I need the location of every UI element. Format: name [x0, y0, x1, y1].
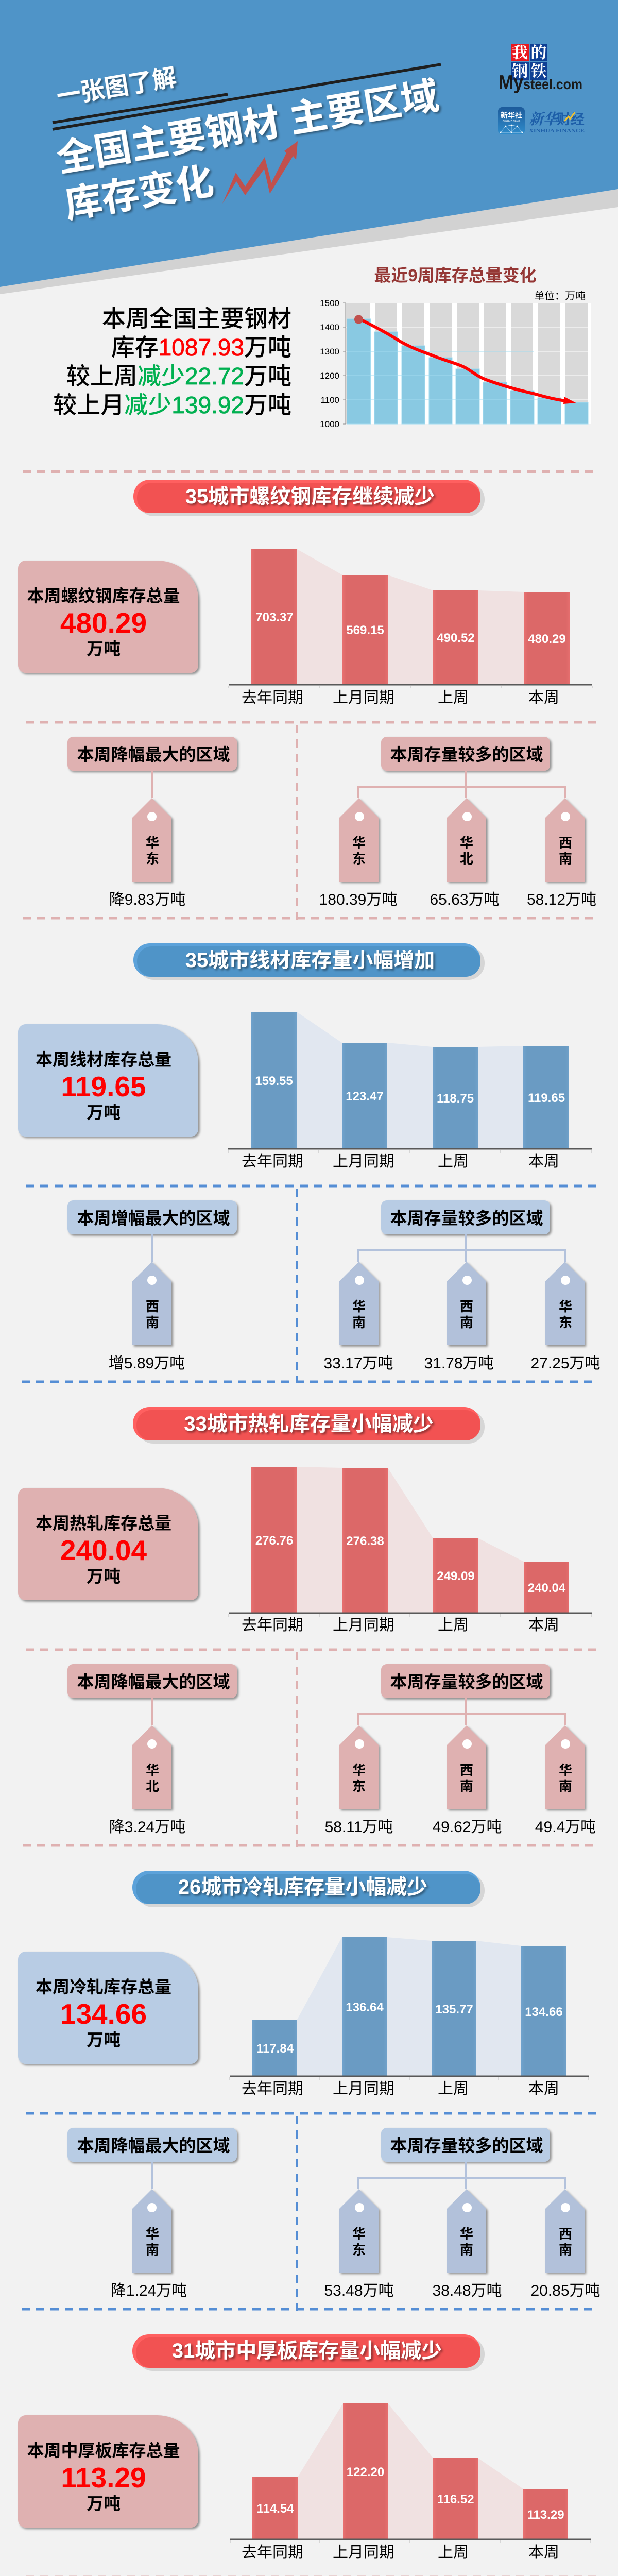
bar chart — [230, 1937, 589, 2097]
largest increase region: 增5.89万吨 — [109, 1355, 185, 1372]
total panel: 本周冷轧库存总量 — [36, 1977, 171, 1996]
tag 3: 南 — [559, 1778, 572, 1794]
bar chart: 276.76 — [255, 1534, 293, 1548]
bar chart — [230, 2403, 591, 2561]
tag 2 — [447, 1725, 486, 1809]
tag 3 — [545, 1725, 585, 1809]
total panel: 119.65 — [61, 1071, 146, 1103]
tag: 华 — [146, 2226, 159, 2242]
total panel — [18, 2415, 198, 2528]
bar chart: 123.47 — [346, 1090, 384, 1104]
tag: 东 — [146, 851, 159, 867]
total panel: 本周线材库存总量 — [36, 1050, 171, 1069]
bar chart: 240.04 — [528, 1581, 566, 1595]
logo: xinhua finance: XINHUA FINANCE — [529, 128, 585, 134]
chart: 9 week inventory — [320, 298, 591, 429]
largest decline region: 降9.83万吨 — [109, 891, 185, 908]
bar chart: 本周 — [528, 1153, 559, 1170]
largest stock regions: 49.4万吨 — [535, 1819, 596, 1836]
bar chart: 上月同期 — [333, 1617, 394, 1634]
largest stock regions: 31.78万吨 — [424, 1355, 494, 1372]
bar chart: 上月同期 — [333, 689, 394, 706]
tag — [132, 798, 171, 882]
logo: mysteel: Mysteel.com — [499, 72, 582, 94]
largest decline region — [67, 737, 237, 908]
tag 3: 南 — [559, 2242, 572, 2258]
tag: 西 — [146, 1299, 159, 1314]
largest stock regions: 58.11万吨 — [325, 1819, 393, 1836]
tag 2: 南 — [460, 2242, 473, 2258]
section heading: 31城市中厚板库存量小幅减少 — [172, 2340, 442, 2362]
largest stock regions — [319, 737, 596, 908]
icon: zigzag arrow — [222, 141, 298, 204]
section heading — [133, 943, 485, 980]
largest stock regions: 58.12万吨 — [527, 891, 596, 908]
logo: xinhua finance: 财经 — [557, 112, 585, 127]
bar chart: 134.66 — [525, 2005, 563, 2019]
bar chart: 136.64 — [346, 2001, 384, 2014]
largest stock regions — [325, 1664, 596, 1836]
logo: xinhua finance: 新华 — [529, 111, 560, 128]
tag 2: 华 — [460, 2226, 473, 2242]
tag: 华 — [146, 835, 159, 851]
section heading: 26城市冷轧库存量小幅减少 — [178, 1876, 427, 1899]
total panel: 万吨 — [87, 1567, 121, 1586]
bar chart: 276.38 — [346, 1534, 384, 1548]
tag 1: 华 — [352, 1299, 366, 1314]
tag: 南 — [146, 1315, 159, 1330]
total panel — [18, 1024, 198, 1137]
trend arrow — [354, 315, 576, 404]
bar chart: 本周 — [528, 1617, 559, 1634]
bar chart: 114.54 — [256, 2502, 294, 2516]
total panel: 万吨 — [87, 639, 121, 658]
section heading: 35城市线材库存量小幅增加 — [185, 949, 435, 972]
tag 3 — [545, 2189, 585, 2273]
tag — [132, 2189, 171, 2273]
tag 3: 华 — [559, 1762, 572, 1778]
largest stock regions — [324, 2128, 600, 2299]
bar chart: 本周 — [528, 689, 559, 706]
chart axis labels — [320, 298, 339, 429]
tag 3: 西 — [559, 835, 572, 851]
logo: xinhua news: XINHUA NEWS — [503, 120, 521, 123]
logo: mysteel — [499, 44, 582, 94]
chart unit: 单位：万吨 — [534, 290, 586, 302]
main title line 1: 全国主要钢材 主要区域 — [54, 75, 442, 180]
chart axis labels: 1000 — [320, 419, 339, 429]
logo: mysteel: 我 — [512, 44, 528, 62]
section heading: 35城市螺纹钢库存继续减少 — [185, 485, 435, 508]
section: medium plate — [18, 2334, 600, 2576]
largest decline region: 降3.24万吨 — [109, 1819, 185, 1836]
section: cold rolled — [18, 1871, 600, 2311]
largest stock regions — [323, 1200, 600, 1372]
largest stock regions: 53.48万吨 — [324, 2282, 394, 2299]
total panel: 240.04 — [60, 1534, 147, 1566]
tag 2: 南 — [460, 1778, 473, 1794]
chart title: 最近9周库存总量变化 — [374, 266, 537, 285]
bar chart — [229, 1467, 592, 1634]
total panel: 134.66 — [60, 1998, 147, 2030]
largest stock regions: 本周存量较多的区域 — [390, 1672, 543, 1691]
largest decline region: 降1.24万吨 — [111, 2282, 187, 2299]
tag 2: 南 — [460, 1315, 473, 1330]
bar chart: 116.52 — [437, 2493, 474, 2506]
section: hot rolled — [18, 1407, 596, 1847]
tag 3 — [545, 798, 585, 882]
total panel: 本周螺纹钢库存总量 — [27, 586, 180, 605]
bar chart — [229, 549, 592, 706]
tag 2: 西 — [460, 1762, 473, 1778]
bar chart: 上周 — [438, 1617, 469, 1634]
tag 1 — [339, 798, 379, 882]
section heading — [132, 2334, 485, 2371]
tag 1: 南 — [352, 1315, 366, 1330]
largest increase region — [67, 1200, 237, 1372]
section heading — [133, 1407, 485, 1444]
bar chart: 122.20 — [347, 2465, 384, 2479]
section: rebar — [18, 480, 596, 920]
largest stock regions: 27.25万吨 — [530, 1355, 600, 1372]
bar chart: 上周 — [438, 689, 469, 706]
tag 3: 南 — [559, 851, 572, 867]
tag 1: 东 — [352, 2242, 366, 2258]
tag 2 — [447, 1262, 486, 1345]
largest decline region: 本周降幅最大的区域 — [77, 745, 230, 764]
tag 1: 华 — [352, 2226, 366, 2242]
largest decline region — [67, 1664, 237, 1836]
total panel — [18, 1952, 198, 2064]
subtitle: 一张图了解 — [55, 63, 178, 110]
bar chart: 118.75 — [437, 1092, 474, 1106]
total panel: 480.29 — [60, 607, 147, 639]
section heading — [133, 480, 485, 516]
largest decline region: 本周降幅最大的区域 — [77, 1672, 230, 1691]
largest stock regions: 33.17万吨 — [323, 1355, 393, 1372]
bar chart — [228, 1012, 592, 1170]
chart axis labels: 1400 — [320, 323, 339, 332]
section heading — [132, 1871, 485, 1907]
main title line 2: 库存变化 — [61, 160, 217, 226]
tag: 华 — [146, 1762, 159, 1778]
tag: 北 — [146, 1778, 159, 1794]
tag 2 — [447, 2189, 486, 2273]
tag 3 — [545, 1262, 585, 1345]
largest stock regions: 本周存量较多的区域 — [390, 1209, 543, 1228]
largest stock regions: 49.62万吨 — [432, 1819, 502, 1836]
largest stock regions: 180.39万吨 — [319, 891, 397, 908]
bar chart: 上月同期 — [333, 2544, 394, 2561]
total panel: 万吨 — [87, 2494, 121, 2513]
bar chart: 249.09 — [437, 1569, 475, 1583]
tag 1: 东 — [352, 1778, 366, 1794]
largest increase region: 本周增幅最大的区域 — [77, 1209, 230, 1228]
bar chart: 去年同期 — [242, 1153, 303, 1170]
bar chart: 490.52 — [437, 631, 475, 645]
bar chart: 去年同期 — [242, 689, 303, 706]
summary text: 本周全国主要钢材 — [102, 305, 291, 332]
bar chart: 703.37 — [255, 611, 294, 624]
tag 2: 华 — [460, 835, 473, 851]
largest stock regions: 20.85万吨 — [530, 2282, 600, 2299]
bar chart: 119.65 — [528, 1091, 565, 1105]
tag — [132, 1262, 171, 1345]
tag: 南 — [146, 2242, 159, 2258]
total panel: 本周热轧库存总量 — [36, 1514, 171, 1533]
largest stock regions: 本周存量较多的区域 — [390, 2136, 543, 2155]
logo: xinhua finance — [529, 111, 585, 134]
bar chart: 159.55 — [255, 1074, 293, 1088]
bar chart: 上月同期 — [333, 1153, 394, 1170]
bar chart: 上周 — [438, 2544, 469, 2561]
total panel: 万吨 — [87, 1103, 121, 1122]
tag 2: 西 — [460, 1299, 473, 1314]
tag 1 — [339, 1262, 379, 1345]
bar chart: 569.15 — [346, 623, 384, 637]
header banner — [0, 0, 618, 294]
tag 2 — [447, 798, 486, 882]
tag 2: 北 — [460, 851, 473, 867]
largest stock regions: 本周存量较多的区域 — [390, 745, 543, 764]
tag — [132, 1725, 171, 1809]
summary text: 较上周减少22.72万吨 — [66, 363, 291, 389]
bar chart: 480.29 — [528, 632, 566, 646]
largest stock regions: 38.48万吨 — [432, 2282, 502, 2299]
bar chart: 135.77 — [435, 2003, 473, 2016]
summary text: 较上月减少139.92万吨 — [53, 392, 291, 418]
chart axis labels: 1500 — [320, 298, 339, 308]
largest decline region: 本周降幅最大的区域 — [77, 2136, 230, 2155]
section: wire rod — [18, 943, 600, 1383]
largest decline region — [67, 2128, 237, 2299]
logo: mysteel: 铁 — [530, 62, 547, 80]
section heading: 33城市热轧库存量小幅减少 — [184, 1413, 434, 1435]
bar chart: 上周 — [438, 1153, 469, 1170]
tag 1: 东 — [352, 851, 366, 867]
total panel — [18, 1488, 198, 1600]
tag 1 — [339, 2189, 379, 2273]
bar chart: 117.84 — [256, 2042, 294, 2056]
bar chart: 去年同期 — [242, 2080, 303, 2097]
summary text — [53, 305, 291, 418]
bar chart: 去年同期 — [242, 2544, 303, 2561]
bar chart: 上月同期 — [333, 2080, 394, 2097]
logo: mysteel: 钢 — [512, 62, 528, 80]
total panel — [18, 561, 198, 673]
logo: xinhua news: 新华社 — [501, 111, 522, 120]
bar chart: 113.29 — [527, 2508, 564, 2522]
tag 3: 华 — [559, 1299, 572, 1314]
logo: mysteel: 的 — [530, 44, 547, 62]
tag 3: 东 — [559, 1315, 572, 1330]
bar chart: 去年同期 — [242, 1617, 303, 1634]
tag 3: 西 — [559, 2226, 572, 2242]
bar chart: 上周 — [438, 2080, 469, 2097]
chart axis labels: 1300 — [320, 347, 339, 357]
chart axis labels: 1200 — [320, 371, 339, 381]
tag 1 — [339, 1725, 379, 1809]
bar chart: 本周 — [528, 2544, 559, 2561]
top divider — [23, 470, 593, 473]
bar chart: 本周 — [528, 2080, 559, 2097]
largest stock regions: 65.63万吨 — [430, 891, 500, 908]
total panel: 113.29 — [61, 2462, 146, 2494]
summary text: 库存1087.93万吨 — [111, 334, 291, 361]
tag 1: 华 — [352, 1762, 366, 1778]
chart axis labels: 1100 — [320, 395, 339, 405]
tag 1: 华 — [352, 835, 366, 851]
total panel: 万吨 — [87, 2030, 121, 2049]
total panel: 本周中厚板库存总量 — [27, 2441, 180, 2460]
logo: xinhua news — [498, 107, 525, 134]
